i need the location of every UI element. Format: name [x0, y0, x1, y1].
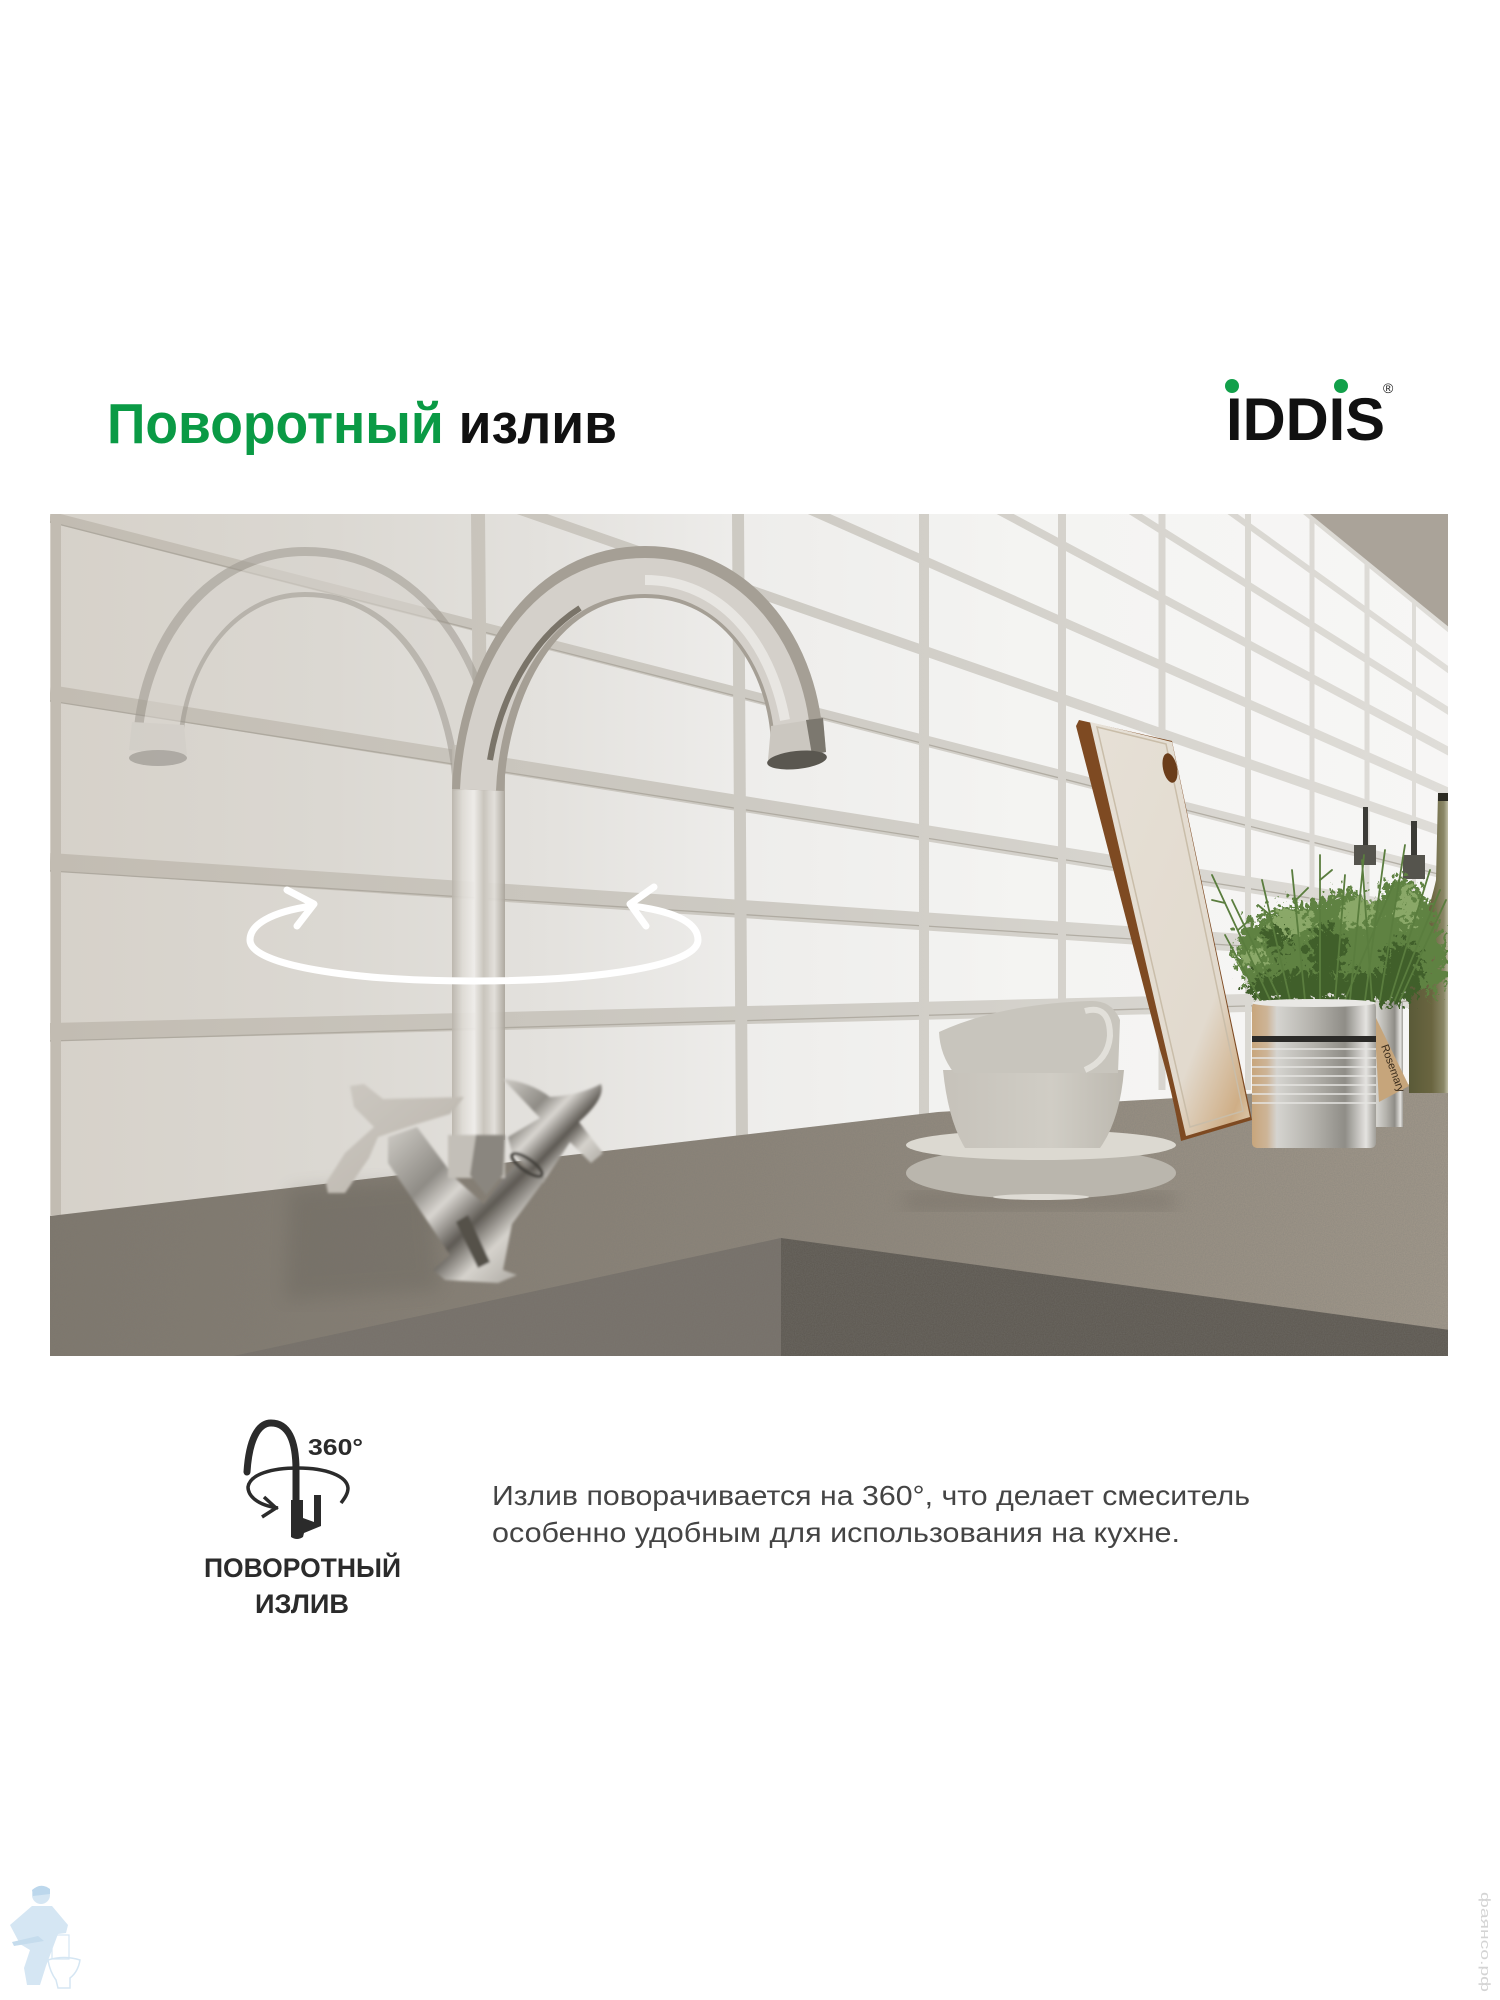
icon label [204, 1552, 401, 1619]
herbs [1212, 845, 1446, 1000]
main spout [478, 572, 828, 790]
ceiling shadow upper right [1310, 514, 1450, 628]
tiled wall [50, 514, 1448, 1216]
watermark: plumber with toilet [10, 1886, 80, 1988]
sink recess [215, 1238, 1450, 1360]
photo: kitchen faucet scene [50, 514, 1448, 1356]
back can [1375, 1002, 1403, 1127]
logo: IDDIS: IDDIS [1226, 386, 1385, 453]
icon label: ИЗЛИВ [255, 1589, 349, 1619]
front can: Rosemary [1378, 1043, 1407, 1095]
logo: IDDIS: ® [1383, 380, 1394, 396]
olive oil bottle [1354, 793, 1450, 1093]
faucet stem [452, 745, 505, 1140]
description text [492, 1480, 1250, 1548]
rotation arrow [250, 887, 698, 981]
cutting board [1076, 720, 1252, 1141]
description text: особенно удобным для использования на кухне. [492, 1517, 1180, 1548]
icon: swivel spout 360 [247, 1423, 363, 1539]
icon label: ПОВОРОТНЫЙ [204, 1552, 401, 1583]
title: Поворотный излив [107, 392, 617, 456]
countertop [50, 1082, 1450, 1360]
description text: Излив поворачивается на 360°, что делает смеситель [492, 1480, 1250, 1511]
faucet handles and body [326, 1079, 603, 1283]
front can [1252, 999, 1409, 1148]
cups and plates [906, 1001, 1176, 1200]
watermark: site name, vertical: фаянсо.рф [1478, 1892, 1493, 1992]
icon: swivel spout 360: 360° [308, 1434, 363, 1460]
ghost spout, rotated position [129, 572, 478, 790]
